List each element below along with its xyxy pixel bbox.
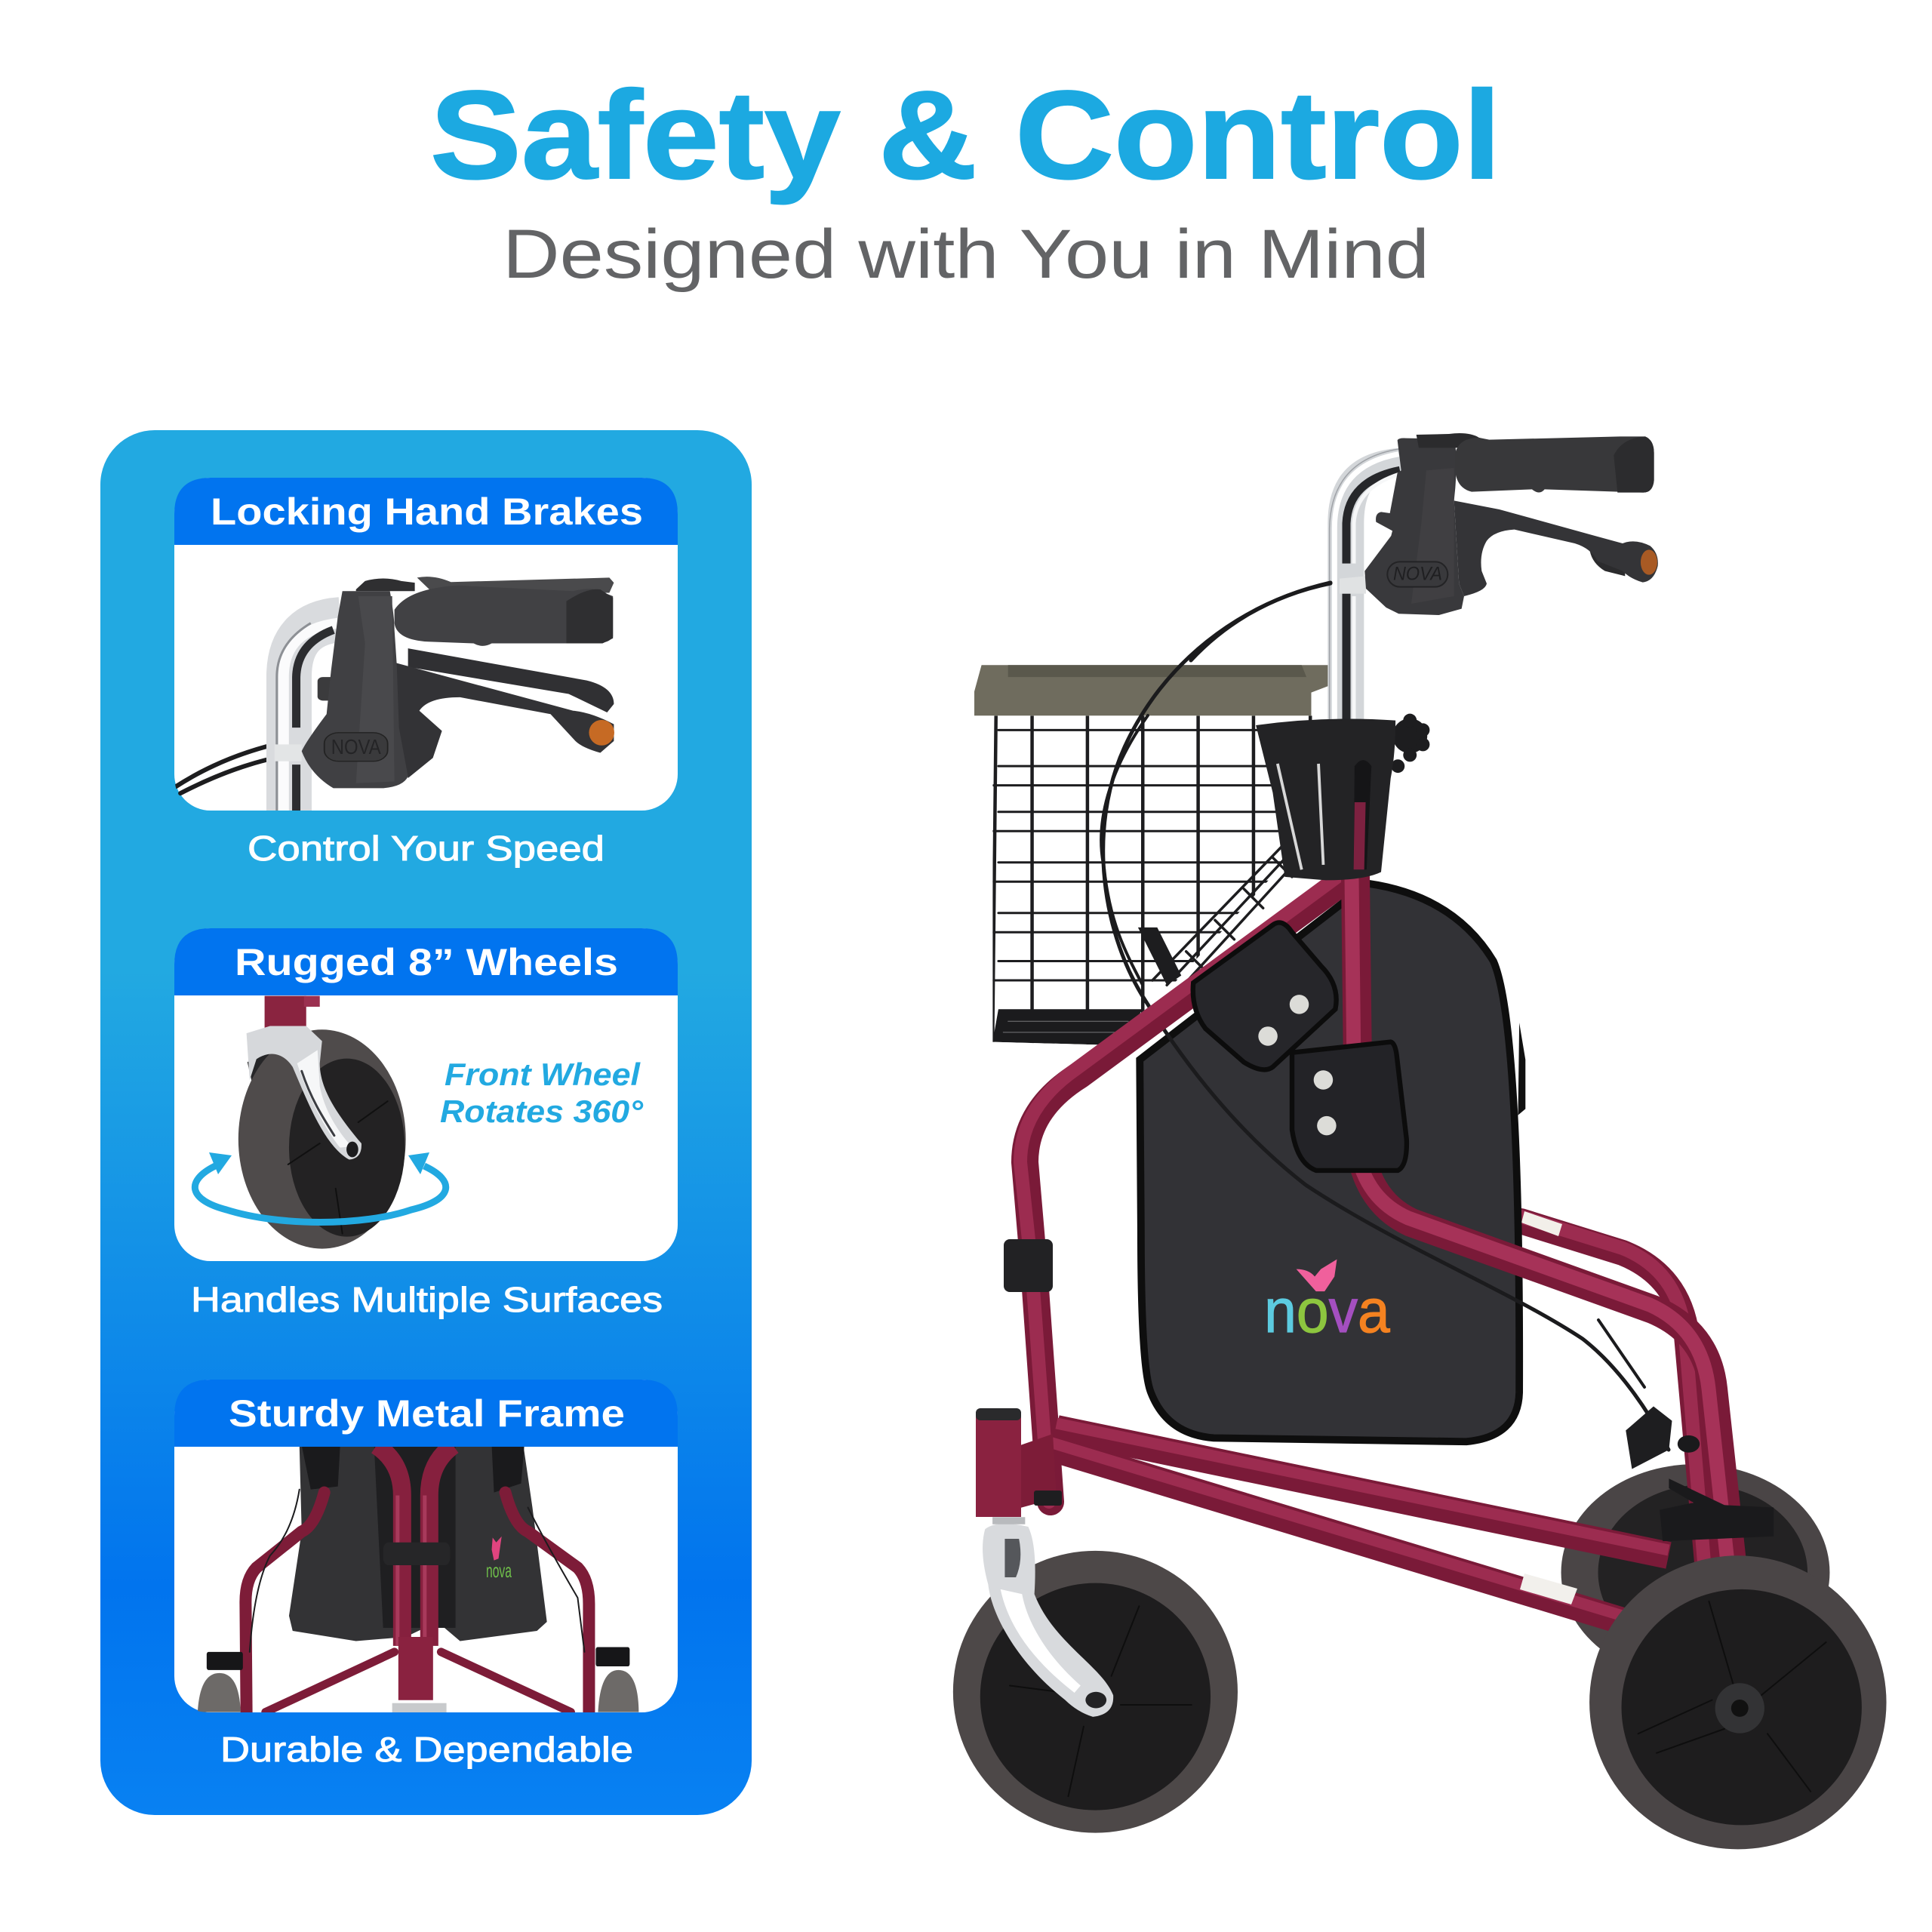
front wheel	[953, 1551, 1238, 1833]
storage bag	[1140, 884, 1525, 1441]
card: locking hand brakes	[174, 478, 678, 868]
caption: control your speed: Control Your Speed	[248, 829, 605, 868]
basket and tray	[974, 665, 1339, 1045]
near rear wheel	[1589, 1555, 1887, 1849]
rear brake block	[1660, 1478, 1774, 1541]
icon: rotation arrows	[195, 1152, 446, 1223]
photo: hand brake	[176, 577, 614, 812]
main frame tubes	[976, 869, 1732, 1621]
subtitle: Designed with You in Mind	[503, 216, 1429, 293]
callout: front wheel rotates	[440, 1057, 644, 1129]
heading: rugged wheels: Rugged 8” Wheels	[235, 941, 618, 983]
cup holder, knob and bag straps	[1193, 714, 1429, 1171]
heading: locking hand brakes: Locking Hand Brakes	[211, 491, 643, 533]
photo: rear view of frame	[198, 1445, 638, 1712]
callout: front wheel rotates: Rotates 360°	[440, 1094, 644, 1129]
chrome handle post	[1327, 448, 1401, 719]
logo: nova: nova	[1264, 1277, 1390, 1346]
label: brake logo: NOVA	[331, 735, 381, 758]
rear frame tube	[1521, 1211, 1707, 1562]
photo: front wheel	[238, 996, 406, 1249]
cables	[1101, 583, 1669, 1450]
far rear wheel	[1561, 1464, 1829, 1681]
front fork and wheels	[953, 1407, 1887, 1849]
label: brake logo: NOVA	[1393, 564, 1442, 584]
caption: handles multiple surfaces: Handles Multiple Surfaces	[191, 1280, 663, 1319]
brake assembly and handle grip	[1364, 433, 1658, 615]
chrome fork	[983, 1524, 1113, 1717]
caption: durable and dependable: Durable & Dependable	[220, 1730, 633, 1769]
heading: sturdy metal frame: Sturdy Metal Frame	[229, 1392, 625, 1435]
card: sturdy metal frame	[174, 1380, 678, 1769]
callout: front wheel rotates: Front Wheel	[445, 1057, 641, 1092]
card: rugged wheels	[174, 928, 678, 1319]
walker product image	[953, 433, 1887, 1849]
title: Safety & Control	[430, 66, 1501, 205]
panel: features	[100, 430, 752, 1815]
label: mini nova logo: nova	[486, 1559, 512, 1582]
